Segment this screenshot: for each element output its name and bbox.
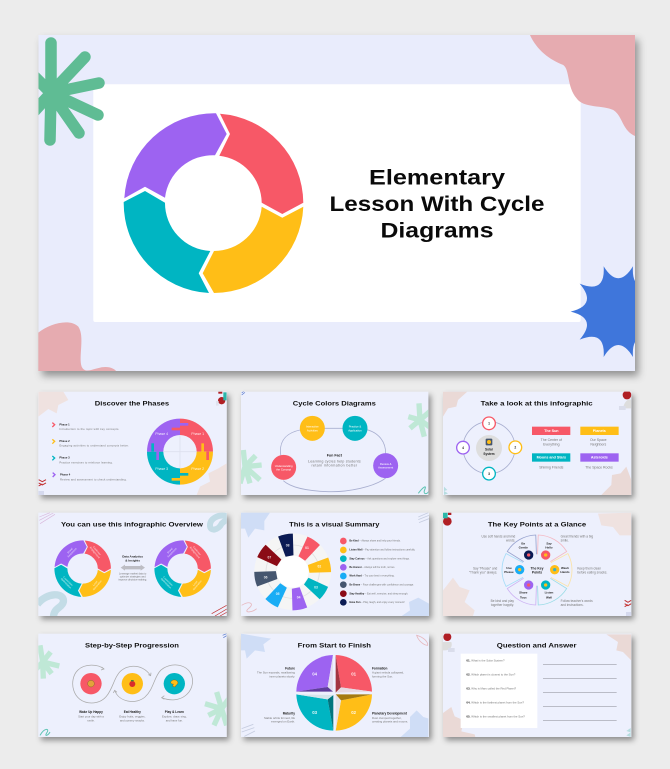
wheel labels — [504, 541, 570, 599]
legend list: Be Kind – Always share and help your friends. — [349, 540, 401, 543]
phase ring: Phase 2 — [191, 467, 204, 471]
pale decorations — [443, 391, 631, 495]
heading: The Key Points at a Glance — [488, 522, 586, 529]
right cycle ring: Conversion — [162, 576, 173, 587]
outer descriptions: and instructions. — [561, 603, 584, 607]
phase list: Engaging activities to understand concepts better. — [59, 444, 129, 448]
left stage text: emerged on Earth. — [271, 720, 295, 724]
outer descriptions: Follow teacher's words — [561, 599, 593, 603]
step captions — [78, 710, 187, 722]
right cycle ring: Engagement — [189, 546, 200, 559]
radial wheel chart: 03 — [314, 585, 318, 589]
outer descriptions: before eating snacks. — [577, 570, 607, 574]
card descriptions: Everything — [543, 443, 560, 447]
label cards: Asteroids — [591, 456, 608, 460]
heading: Cycle Colors Diagrams — [293, 401, 376, 408]
slide: Question and Answer — [443, 633, 631, 737]
pale decorations — [241, 513, 429, 616]
heading: Discover the Phases — [95, 401, 169, 408]
right cycle ring: Brand — [167, 547, 174, 554]
six segment wheel — [502, 535, 572, 605]
phase ring: Phase 1 — [191, 432, 204, 436]
radial wheel chart: 05 — [276, 592, 280, 596]
pale decorations — [37, 513, 227, 619]
radial wheel chart: 01 — [305, 546, 309, 550]
outer descriptions: Use soft hands and kind — [481, 535, 516, 539]
left stage text: Stable orbits formed, life — [264, 716, 295, 720]
heading: This is a visual Summary — [289, 522, 380, 529]
wheel labels: Listen — [545, 591, 554, 595]
phase list: Introduction to the topic with key concepts. — [59, 427, 120, 431]
center analytics text and arrow: Data Analytics — [122, 554, 143, 558]
wheel labels: Well — [546, 595, 552, 599]
legend list — [340, 538, 416, 606]
outer descriptions: Keep them clean — [577, 566, 601, 570]
folded pie chart: 02 — [351, 710, 357, 715]
heading: Take a look at this infographic — [481, 401, 593, 408]
answer lines — [543, 664, 617, 720]
solar cycle diagram: 3 — [488, 472, 490, 476]
left stage text: Future — [285, 666, 295, 670]
right cycle ring: Optimization — [160, 577, 172, 590]
right cycle ring: Lead — [192, 581, 198, 587]
right stage text: forming the Sun. — [372, 674, 393, 678]
cycle nodes: Application — [348, 428, 362, 432]
left cycle ring: Generation — [92, 579, 103, 591]
right cycle ring — [154, 540, 211, 597]
question panel: 03. Why is Mars called the Red Planet? — [466, 686, 516, 690]
left stage text: inner planets slowly. — [269, 674, 295, 678]
step captions: Wake Up Happy — [79, 710, 103, 714]
cycle nodes: Interactive — [306, 425, 319, 429]
main title — [330, 166, 545, 242]
cycle nodes: Review & — [380, 462, 392, 466]
outer descriptions: "Thank you" always. — [469, 570, 497, 574]
center analytics text and arrow — [118, 554, 147, 582]
fun fact text: Fun Fact — [327, 454, 343, 458]
radial wheel chart: 04 — [297, 595, 301, 599]
folded pie chart: 01 — [351, 671, 357, 676]
step captions: Start your day with a — [78, 715, 104, 719]
outer descriptions: together happily. — [491, 603, 514, 607]
right stage text: Planetary Development — [372, 712, 408, 716]
phase list: Practice exercises to reinforce learning. — [59, 460, 113, 464]
center analytics text and arrow: improve decision-making. — [118, 579, 147, 582]
winding path arrows — [73, 665, 193, 703]
outer descriptions: words. — [506, 539, 515, 543]
main title: Lesson With Cycle — [330, 192, 545, 216]
outer descriptions: Greet friends with a big — [561, 535, 593, 539]
solar cycle diagram: 1 — [488, 422, 490, 426]
slide: Discover the Phases — [38, 392, 227, 495]
pale decorations — [241, 634, 429, 737]
radial wheel chart: 06 — [264, 575, 268, 579]
legend list: Stay Curious – Ask questions and explore new things. — [349, 557, 410, 560]
label cards: Planets — [593, 429, 606, 433]
left cycle ring: Lead — [92, 581, 98, 587]
cycle nodes: Assessment — [378, 466, 393, 470]
left cycle ring: Customer — [92, 546, 101, 556]
question panel: 05. Which is the smallest planet from the Sun? — [466, 714, 525, 718]
legend list: Stay Healthy – Eat well, exercise, and sleep enough. — [349, 592, 408, 595]
solar cycle diagram: 4 — [462, 446, 464, 450]
radial wheel chart: 08 — [286, 544, 290, 548]
wheel labels: Gentle — [519, 546, 528, 550]
step captions: Explore, draw, sing, — [162, 715, 187, 719]
solar cycle diagram: System — [483, 452, 495, 456]
center analytics text and arrow: Leverage market data to — [119, 573, 147, 576]
legend list: Listen Well – Pay attention and follow instructions carefully. — [349, 549, 416, 552]
legend list: Have Fun – Play, laugh, and enjoy every moment! — [349, 601, 405, 604]
fun fact text: Learning cycles help students — [308, 459, 361, 463]
card descriptions — [539, 438, 613, 470]
card descriptions: The Center of — [541, 438, 562, 442]
phase list — [52, 422, 129, 481]
left cycle ring: Engagement — [89, 546, 100, 559]
fun fact text: retain information better — [311, 464, 358, 468]
legend list: Be Honest – Always tell the truth, no lies. — [349, 566, 395, 569]
folded pie chart: 04 — [312, 671, 318, 676]
pale decorations — [240, 391, 432, 494]
folded pie chart — [296, 655, 372, 731]
wheel labels: Say — [546, 542, 552, 546]
left cycle ring: Optimization — [60, 577, 72, 590]
radial wheel chart — [254, 533, 332, 611]
left stage text — [257, 666, 295, 724]
question panel: 02. Which planet is closest to the Sun? — [466, 672, 516, 676]
pale decorations — [38, 392, 227, 495]
main title slide — [30, 35, 657, 371]
outer descriptions: Be kind and play — [491, 599, 514, 603]
card descriptions: Shining Friends — [539, 466, 564, 470]
outer descriptions — [469, 535, 607, 607]
step captions: Enjoy fruits, veggies, — [119, 715, 146, 719]
phase ring — [147, 419, 213, 485]
wheel labels: Share — [519, 591, 528, 595]
left cycle ring: Conversion — [62, 576, 73, 587]
cycle nodes: Activities — [307, 428, 318, 432]
wheel labels: Please — [504, 570, 514, 574]
right cycle ring: Awareness — [167, 547, 178, 558]
left cycle ring: Awareness — [67, 547, 78, 558]
question panel — [461, 654, 537, 728]
folded pie chart: 03 — [312, 710, 318, 715]
phase list: Phase 4 — [60, 473, 71, 477]
step captions: and have fun. — [166, 718, 183, 722]
left stage text: Maturity — [283, 712, 295, 716]
connecting cycle lines — [280, 428, 386, 492]
question panel: 01. What is the Solar System? — [466, 658, 505, 662]
slide: Step-by-Step Progression — [35, 634, 230, 737]
main title: Diagrams — [380, 218, 494, 242]
slide: Cycle Colors Diagrams — [240, 391, 432, 495]
wheel labels: Wash — [561, 566, 569, 570]
slide: You can use this infographic Overview — [37, 513, 227, 619]
step captions: and yummy snacks. — [120, 718, 145, 722]
right stage text — [372, 666, 408, 724]
left stage text: The Sun expands, swallowing — [257, 671, 295, 675]
heading: From Start to Finish — [298, 643, 371, 650]
phase list: Review and assessment to check understanding. — [60, 477, 127, 481]
main title: Elementary — [369, 166, 505, 190]
fun fact text — [308, 454, 361, 468]
heading: You can use this infographic Overview — [61, 522, 204, 529]
phase list: Phase 2 — [59, 439, 70, 443]
slide: The Key Points at a Glance — [443, 513, 631, 617]
blue star bottom right — [570, 266, 635, 357]
heading: Step-by-Step Progression — [85, 643, 179, 650]
right cycle ring: Generation — [192, 579, 203, 591]
wheel labels: Points — [532, 571, 542, 575]
cycle nodes: the Concept — [276, 468, 291, 472]
cycle nodes: Understanding — [275, 464, 293, 468]
pale decorations — [443, 633, 631, 737]
center analytics text and arrow: optimize strategies and — [120, 576, 146, 579]
right stage text: Formation — [372, 666, 387, 670]
pale decorations — [35, 634, 230, 735]
wheel labels: Be — [521, 541, 526, 545]
label cards — [532, 427, 619, 462]
right cycle ring: Customer — [192, 546, 201, 556]
step captions: Eat Healthy — [124, 710, 141, 714]
label cards: Moons and Stars — [537, 456, 566, 460]
card descriptions: The Space Rocks — [585, 466, 613, 470]
step icons — [80, 673, 185, 694]
wheel labels: Use — [506, 566, 512, 570]
outer descriptions: smile. — [561, 539, 569, 543]
heading: Question and Answer — [497, 643, 577, 650]
question panel: 04. Which is the farthest planet from the Sun? — [466, 700, 524, 704]
wheel labels: Hello — [545, 546, 553, 550]
radial wheel chart: 02 — [317, 565, 321, 569]
cycle nodes: Practice & — [349, 425, 361, 429]
pink blob top right — [530, 35, 635, 136]
radial wheel chart: 07 — [267, 556, 271, 560]
phase list: Phase 3 — [59, 456, 70, 460]
outer descriptions: Say "Please" and — [473, 566, 498, 570]
right stage text: A giant nebula collapsed, — [372, 671, 404, 675]
label cards: The Sun — [544, 429, 559, 433]
slide: Take a look at this infographic — [443, 391, 631, 495]
wheel labels: Toys — [520, 595, 527, 599]
cycle nodes — [271, 416, 398, 480]
right stage text: creating planets and moons. — [372, 720, 408, 724]
phase ring: Phase 3 — [155, 467, 168, 471]
solar cycle diagram — [457, 417, 522, 480]
wheel labels: The Key — [531, 566, 544, 570]
phase list: Phase 1 — [59, 422, 70, 426]
left cycle ring: Brand — [67, 547, 74, 554]
card descriptions: Our Space — [590, 438, 607, 442]
wheel icons — [515, 550, 559, 590]
slide: From Start to Finish — [241, 634, 429, 737]
white content panel — [93, 84, 581, 322]
legend list: Be Brave – Face challenges with confidence and courage. — [349, 583, 414, 586]
main cycle ring — [124, 113, 303, 293]
wheel labels: Hands — [560, 570, 570, 574]
pink blob bottom left — [38, 322, 116, 371]
left cycle ring — [54, 540, 111, 597]
card descriptions: Neighbors — [590, 443, 607, 447]
step captions: smile. — [87, 718, 95, 722]
solar cycle diagram: Solar — [485, 448, 494, 452]
green asterisk decoration — [30, 43, 99, 140]
slide: This is a visual Summary — [241, 513, 429, 616]
center analytics text and arrow: & Insights — [125, 559, 140, 563]
step captions: Play & Learn — [165, 710, 184, 714]
legend list: Work Hard – Try your best in everything. — [349, 575, 395, 578]
pale decorations — [443, 513, 631, 617]
right stage text: Dust clumped together, — [372, 716, 402, 720]
solar cycle diagram: 2 — [514, 446, 516, 450]
phase ring: Phase 4 — [155, 432, 168, 436]
